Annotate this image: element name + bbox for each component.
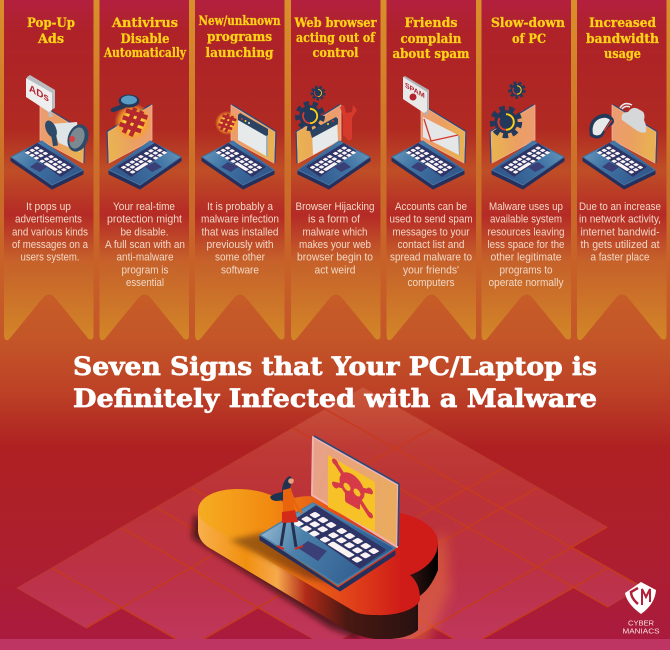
text: description: Accounts can be [395, 201, 467, 213]
heading: Web browser acting out of control: control [312, 46, 359, 61]
text: description: essential [126, 277, 164, 289]
panel: New/unknown programs launching [195, 0, 284, 340]
heading: New/unknown programs launching: launching [206, 46, 274, 61]
heading: Increased bandwidth usage: bandwidth [586, 32, 660, 47]
text: description: and various kinds [12, 226, 89, 238]
text: description: browser begin to [297, 252, 373, 264]
logo: Cyber Maniacs [622, 582, 660, 636]
text: description: A full scan with an [105, 239, 185, 251]
bottom strip [0, 639, 670, 650]
text: description: available system [490, 214, 562, 226]
text: description: spread malware to [390, 252, 472, 264]
text: description [201, 201, 279, 276]
text: description: in network activity, [579, 214, 661, 226]
icon: laptop with gears [490, 83, 564, 189]
text: description: of messages on a [12, 239, 88, 251]
text: description: It is probably a [207, 201, 273, 213]
text: description: Your real-time [113, 201, 175, 213]
panel: Web browser acting out of control [291, 0, 380, 340]
heading: Web browser acting out of control: acting out of [296, 31, 376, 46]
icon: laptop with magnifier and virus [107, 94, 181, 189]
heading: Friends complain about spam: about spam [392, 47, 470, 62]
logo: Cyber Maniacs: CYBER [628, 620, 654, 628]
heading: Web browser acting out of control: Web browser [294, 16, 377, 31]
cloud top [198, 489, 438, 615]
text: description: advertisements [15, 214, 83, 226]
text: description: is a form of [308, 214, 361, 226]
heading: Web browser acting out of control [294, 16, 377, 61]
heading: Antivirus Disable Automatically: Disable [120, 32, 170, 47]
panel: Pop-Up Ads [4, 0, 94, 340]
woman walking [270, 476, 303, 549]
panel: Antivirus Disable Automatically [100, 0, 189, 340]
heading: Antivirus Disable Automatically: Automatically [103, 46, 186, 61]
text: description [390, 201, 473, 289]
large laptop [260, 436, 399, 591]
text: description: a faster place [590, 252, 650, 264]
text: description [12, 201, 89, 264]
text: description: previously with [206, 239, 274, 251]
icon: laptop with megaphone and ADs bubble [11, 75, 92, 189]
text: description: malware which [302, 226, 368, 238]
title [73, 352, 597, 413]
icon: laptop with SPAM bubble and envelope: SPAM [405, 81, 425, 100]
text: description: makes your web [299, 239, 371, 251]
cloud side [198, 510, 438, 639]
text: description: th gets utilized at [580, 239, 660, 251]
text: description: messages to your [392, 226, 470, 238]
text: description: It pops up [26, 201, 71, 213]
text: description: anti-malware [116, 252, 174, 264]
text: description: used to send spam [390, 214, 473, 226]
skull and crossbones [332, 457, 373, 520]
keyboard keys [293, 507, 384, 567]
text: description: software [221, 264, 259, 276]
title: Definitely Infected with a Malware [73, 384, 597, 413]
laptop shadow on cloud [230, 533, 340, 585]
heading: Friends complain about spam [392, 16, 470, 62]
icon: laptop with SPAM bubble and envelope [392, 76, 466, 189]
text: description: operate normally [488, 277, 564, 289]
heading: New/unknown programs launching: programs [207, 30, 272, 45]
text: description: program is [122, 264, 169, 276]
text: description: be disable. [120, 226, 168, 238]
panel: Friends complain about spam [386, 0, 476, 340]
heading: Slow-down of PC [491, 16, 566, 47]
text: description [579, 201, 661, 264]
cloud shadow [192, 515, 450, 650]
text: description: less space for the [488, 239, 564, 251]
text: description: that was installed [202, 226, 278, 238]
text: description: your friends' [403, 264, 459, 276]
text: description: protection might [107, 214, 182, 226]
panel: Slow-down of PC [482, 0, 571, 340]
text: description: programs to [500, 264, 552, 276]
heading: New/unknown programs launching [198, 14, 281, 61]
heading: Pop-Up Ads: Pop-Up [27, 16, 75, 31]
isometric floor grid [17, 387, 642, 647]
text: description: malware infection [201, 214, 279, 226]
heading: Increased bandwidth usage: Increased [589, 16, 656, 31]
text: description: users system. [20, 252, 80, 264]
heading: Pop-Up Ads [27, 16, 75, 47]
text: description: resources leaving [488, 226, 564, 238]
icon: laptop with gears, wrench and browser [296, 87, 370, 189]
text: description: act weird [314, 264, 356, 276]
heading: Increased bandwidth usage [586, 16, 660, 62]
text: description: other legitimate [490, 252, 562, 264]
title: Seven Signs that Your PC/Laptop is [73, 352, 597, 381]
icon: laptop with speed gauge, cloud and wifi [583, 104, 657, 189]
text: description [488, 201, 564, 289]
text: description: Due to an increase [579, 201, 661, 213]
heading: Antivirus Disable Automatically: Antivirus [111, 16, 178, 31]
text: description [296, 201, 374, 276]
text: description: Malware uses up [489, 201, 563, 213]
heading: New/unknown programs launching: New/unknown [198, 14, 281, 29]
text: description: Browser Hijacking [296, 201, 374, 213]
text: description: contact list and [398, 239, 464, 251]
text: description: computers [408, 277, 455, 289]
heading: Pop-Up Ads: Ads [37, 32, 64, 47]
icon: laptop with megaphone and ADs bubble: ADs [29, 83, 49, 105]
heading: Antivirus Disable Automatically [103, 16, 186, 61]
heading: Friends complain about spam: Friends [404, 16, 458, 31]
illustration: cloud platform with laptop and woman [192, 436, 450, 650]
heading: Increased bandwidth usage: usage [604, 47, 641, 62]
text: description: some other [215, 252, 265, 264]
logo: Cyber Maniacs: MANIACS [622, 628, 660, 636]
panel: Increased bandwidth usage [577, 0, 666, 340]
icon: laptop with pop-up window and virus [202, 104, 276, 189]
heading: Slow-down of PC: Slow-down [491, 16, 566, 31]
text: description [105, 201, 185, 289]
heading: Friends complain about spam: complain [400, 32, 462, 47]
heading: Slow-down of PC: of PC [512, 32, 546, 47]
text: description: internet bandwid- [580, 226, 660, 238]
